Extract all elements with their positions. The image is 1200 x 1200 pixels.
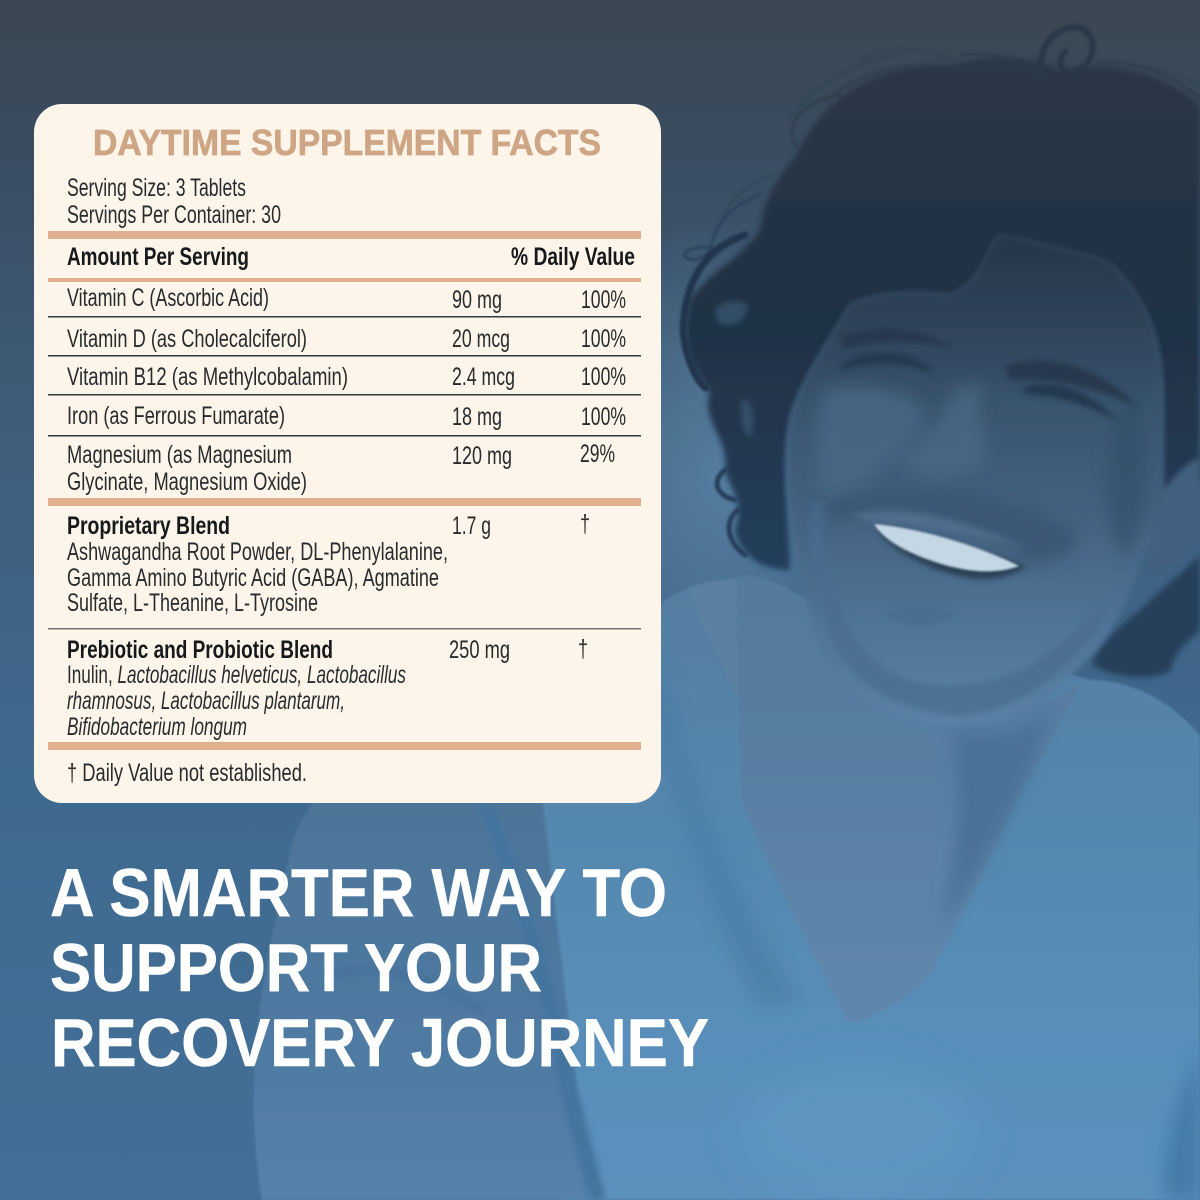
face	[788, 235, 1163, 726]
row: iron	[48, 402, 641, 436]
row: iron: 18 mg	[452, 403, 502, 431]
row: vitamin D	[48, 325, 641, 356]
arm fold shadows	[330, 800, 1200, 1200]
row: prebiotic and probiotic blend: †	[578, 635, 588, 663]
left arm	[254, 780, 590, 1200]
left eyebrow	[839, 328, 953, 350]
row: proprietary blend	[67, 510, 590, 617]
row: vitamin B12: 2.4 mcg	[452, 363, 515, 391]
left eye	[839, 353, 936, 374]
right eye	[1022, 384, 1119, 422]
moustache	[822, 491, 1081, 565]
neck and chest inside V-neck	[736, 576, 1084, 1023]
upper lip	[850, 511, 1030, 550]
row: iron: Iron (as Ferrous Fumarate)	[67, 402, 285, 430]
teeth	[874, 524, 1019, 571]
row: prebiotic and probiotic blend: Inulin, Lactobacillus helveticus, Lactobacillus	[67, 661, 406, 689]
sweater bright highlight	[740, 1060, 980, 1200]
headline: A SMARTER WAY TO	[50, 855, 667, 931]
row: proprietary blend: Proprietary Blend	[67, 512, 230, 540]
row: vitamin C: 90 mg	[452, 286, 502, 314]
sweater torso	[480, 580, 1200, 1200]
footnote: † Daily Value not established.	[67, 759, 307, 787]
row: magnesium: Magnesium (as Magnesium	[67, 441, 292, 469]
row: magnesium	[67, 440, 615, 496]
mouth shadow	[876, 528, 1026, 579]
chin shadow	[886, 607, 954, 625]
sweater darker shade by collar	[645, 640, 800, 1010]
hair gaps on left	[715, 301, 753, 437]
row: proprietary blend: Gamma Amino Butyric Acid (GABA), Agmatine	[67, 564, 439, 592]
row: vitamin D: Vitamin D (as Cholecalciferol)	[67, 325, 307, 353]
row: proprietary blend: Ashwagandha Root Powder, DL-Phenylalanine,	[67, 538, 448, 566]
row: vitamin C	[48, 284, 641, 318]
neck shadow	[940, 715, 1050, 930]
row: vitamin D: 100%	[581, 325, 626, 353]
row: prebiotic and probiotic blend: Prebiotic and Probiotic Blend	[67, 636, 333, 664]
row: vitamin B12: Vitamin B12 (as Methylcobalamin)	[67, 363, 348, 391]
serving information: Serving Size: 3 Tablets	[67, 174, 246, 202]
hair back and main mass	[686, 57, 1200, 570]
row: vitamin D: 20 mcg	[452, 325, 510, 353]
row: vitamin B12	[48, 363, 641, 396]
shirt collar tab	[688, 578, 738, 700]
row: iron: 100%	[581, 403, 626, 431]
row: vitamin C: Vitamin C (Ascorbic Acid)	[67, 284, 269, 312]
row: magnesium: 120 mg	[452, 442, 512, 470]
serving information: Servings Per Container: 30	[67, 201, 281, 229]
right cheek shade	[1107, 380, 1148, 560]
photo: smiling man in blue sweater	[254, 27, 1200, 1200]
table header	[48, 231, 641, 282]
serving information	[67, 174, 281, 229]
left cheek highlight	[818, 386, 925, 495]
row: magnesium: 29%	[580, 440, 615, 468]
headline: SUPPORT YOUR	[50, 930, 542, 1006]
headline: RECOVERY JOURNEY	[51, 1005, 709, 1081]
lower right curl	[1092, 555, 1200, 677]
nose highlight	[901, 385, 986, 478]
row: prebiotic and probiotic blend: 250 mg	[449, 636, 510, 664]
table header: Amount Per Serving	[67, 243, 249, 271]
right eyebrow	[1005, 360, 1139, 408]
stubble jaw	[810, 500, 1130, 716]
row: prebiotic and probiotic blend	[67, 635, 588, 741]
row: vitamin B12: 100%	[581, 363, 626, 391]
table header: % Daily Value	[511, 243, 635, 271]
panel: supplement facts	[34, 104, 661, 803]
ear	[1147, 458, 1200, 568]
hair strands and curls	[683, 27, 1200, 555]
panel title: DAYTIME SUPPLEMENT FACTS	[93, 122, 601, 163]
row: proprietary blend: 1.7 g	[452, 512, 491, 540]
row: magnesium: Glycinate, Magnesium Oxide)	[67, 468, 307, 496]
panel background	[34, 104, 661, 803]
row: vitamin C: 100%	[581, 286, 626, 314]
headline	[50, 855, 709, 1081]
row: prebiotic and probiotic blend: rhamnosus, Lactobacillus plantarum,	[67, 687, 345, 715]
row: proprietary blend: †	[580, 510, 590, 538]
row: proprietary blend: Sulfate, L-Theanine, L-Tyrosine	[67, 589, 318, 617]
row: prebiotic and probiotic blend: Bifidobacterium longum	[67, 713, 247, 741]
